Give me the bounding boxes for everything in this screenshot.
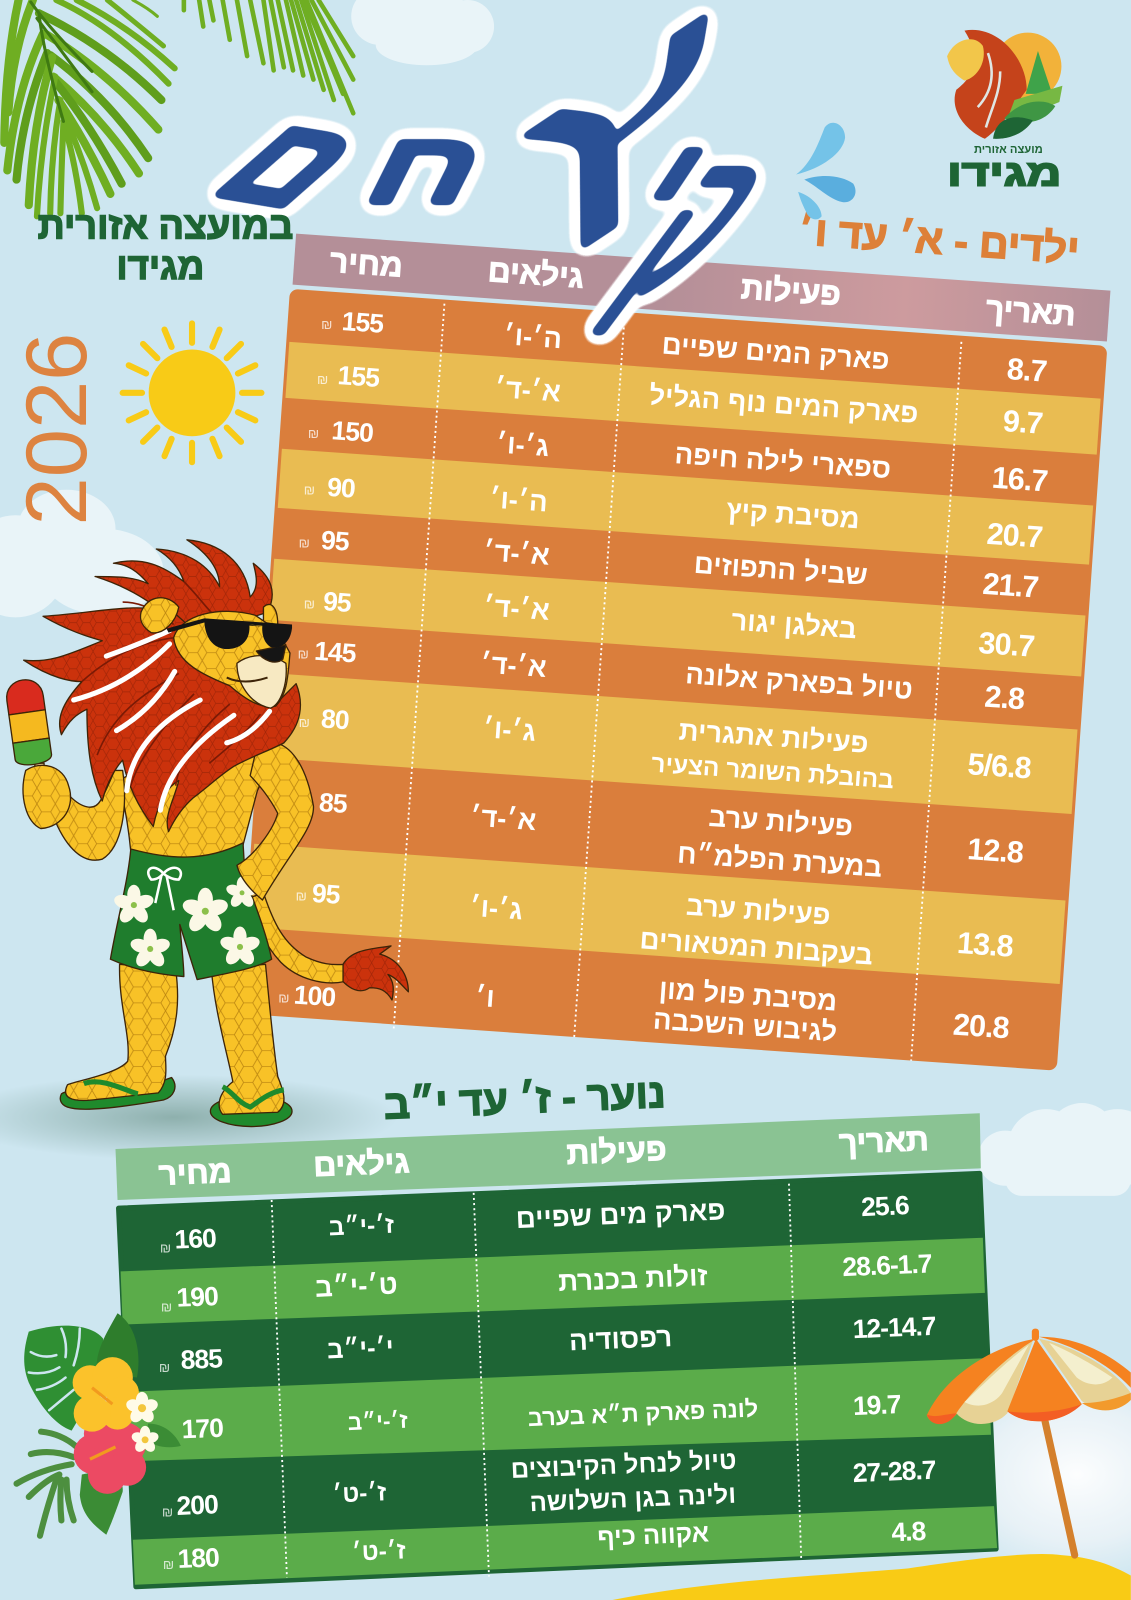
row 16.7: 150	[331, 415, 374, 448]
row 19.7: 170	[181, 1413, 224, 1444]
row 12.8	[318, 787, 1025, 883]
teens table header	[116, 1113, 981, 1200]
row 5/6.8: בהובלת השומר הצעיר	[651, 751, 895, 794]
lion smile	[227, 678, 268, 681]
row 21.7	[299, 525, 1039, 605]
row 25.6	[160, 1190, 910, 1255]
children table header: גילאים	[487, 252, 585, 295]
row 2.8	[298, 636, 1026, 716]
right arm	[237, 742, 313, 900]
row 12-14.7: 12-14.7	[852, 1311, 936, 1344]
row 8.7	[321, 306, 1048, 389]
row 9.7: ₪	[317, 372, 328, 387]
row 27-28.7: ולינה בגן השלושה	[529, 1481, 737, 1517]
mane white streaks	[74, 631, 270, 810]
row 5/6.8: 80	[320, 703, 350, 735]
teens table header: גילאים	[313, 1143, 410, 1183]
row 2.8: א׳-ד׳	[479, 648, 548, 683]
row 20.8: 20.8	[952, 1008, 1011, 1045]
row 19.7	[181, 1389, 901, 1444]
title letter: י	[592, 105, 743, 275]
palm fronds	[4, 0, 353, 216]
row 27-28.7: ז׳-ט׳	[332, 1479, 387, 1508]
row 9.7: 155	[337, 360, 381, 393]
cloud: left	[0, 490, 163, 617]
cloud: top	[351, 0, 494, 65]
row 8.7: 155	[341, 306, 385, 339]
row 4.8: 4.8	[891, 1516, 926, 1547]
row 19.7: ז׳-י״ב	[347, 1408, 408, 1435]
row 30.7: באלגן יגור	[730, 605, 858, 644]
row 21.7: 21.7	[982, 567, 1039, 605]
umbrella cream panel	[956, 1341, 1033, 1424]
logo: Megiddo regional council	[947, 30, 1062, 194]
row 8.7: פארק המים שפיים	[661, 329, 891, 375]
side leaf	[145, 1423, 181, 1447]
row 13.8: 95	[311, 878, 342, 910]
title letter: ם	[177, 92, 408, 233]
children table header: פעילות	[740, 269, 842, 312]
row 5/6.8: ג׳-ו׳	[482, 712, 537, 747]
umbrella right cream panel	[1039, 1339, 1131, 1408]
row 28.6-1.7: ₪	[161, 1300, 172, 1315]
children table header: מחיר	[329, 243, 404, 284]
row 12-14.7: 885	[180, 1343, 224, 1375]
row 21.7: שביל התפוזים	[693, 548, 869, 591]
row 20.7: ₪	[304, 482, 315, 497]
row 12-14.7: י׳-י״ב	[327, 1334, 394, 1364]
icon: sun	[123, 323, 261, 462]
lower leaf	[80, 1473, 123, 1535]
sunglasses	[167, 618, 292, 649]
row 30.7: 95	[322, 586, 353, 618]
row 20.8: ₪	[278, 990, 290, 1005]
lion face	[174, 611, 290, 707]
popsicle stick	[35, 763, 44, 782]
teens table header: פעילות	[566, 1131, 667, 1171]
sand	[612, 1554, 1131, 1600]
illustration: lion mascot	[4, 540, 408, 1127]
ground shadow band	[0, 1074, 398, 1160]
row 12-14.7: רפסודיה	[569, 1321, 673, 1356]
row 8.7: ה׳-ו׳	[503, 319, 563, 354]
row 4.8: 180	[177, 1542, 220, 1574]
table: teens	[116, 1113, 997, 1587]
row 12.8: פעילות ערב	[708, 801, 854, 842]
illustration: beach umbrella	[927, 1329, 1131, 1555]
lion nose	[256, 645, 286, 662]
row 16.7	[308, 415, 1048, 498]
children table rows background	[239, 289, 1107, 1075]
logo lion face	[947, 39, 984, 81]
row 20.7: ה׳-ו׳	[488, 482, 549, 518]
row 28.6-1.7: זולות בכנרת	[558, 1260, 708, 1297]
row 13.8: בעקבות המטאורים	[639, 923, 874, 971]
row 2.8: טיול בפארק אלונה	[685, 658, 914, 705]
year 2026: 2026	[8, 333, 105, 526]
row 28.6-1.7: 190	[176, 1281, 219, 1313]
row 19.7: 19.7	[852, 1389, 901, 1421]
row 12.8: 85	[318, 787, 349, 819]
row 19.7: לונה פארק ת״א בערב	[527, 1395, 759, 1431]
row 5/6.8	[299, 703, 1033, 794]
left arm	[53, 770, 124, 860]
row 13.8: פעילות ערב	[685, 890, 832, 931]
row 27-28.7: 27-28.7	[852, 1455, 936, 1488]
heading: council name: במועצה אזורית	[38, 205, 293, 247]
row 12-14.7: ₪	[159, 1360, 170, 1375]
lion muzzle	[237, 656, 286, 708]
logo tree	[1026, 51, 1052, 94]
row 4.8: אקווה כיף	[597, 1519, 710, 1552]
row 21.7: 95	[320, 525, 351, 557]
children table header	[293, 234, 1110, 342]
mane top spikes	[95, 540, 272, 633]
flip-flop straps	[84, 1082, 284, 1107]
umbrella right panel	[1039, 1337, 1131, 1388]
umbrella left panel	[927, 1339, 1035, 1423]
row 12.8: 12.8	[966, 832, 1025, 870]
row 21.7: ₪	[299, 535, 310, 550]
row 20.7: מסיבת קיץ	[725, 494, 861, 534]
icon: water splash	[796, 123, 856, 219]
fern leaves	[17, 1432, 77, 1536]
row 27-28.7: טיול לנחל הקיבוצים	[510, 1447, 737, 1484]
logo lion mane	[955, 30, 1027, 139]
row 28.6-1.7: ט׳-י״ב	[314, 1269, 398, 1303]
row 9.7: א׳-ד׳	[494, 372, 562, 408]
fog behind umbrella	[924, 1362, 1131, 1587]
monstera slits	[29, 1329, 80, 1410]
frond: right	[184, 0, 353, 113]
heading: council name	[38, 205, 293, 287]
white flowers	[125, 1392, 159, 1425]
subtitle: children: ילדים - א׳ עד ו׳	[797, 207, 1081, 273]
lion tail tuft	[343, 946, 408, 1000]
row 16.7: ₪	[308, 426, 319, 441]
row 5/6.8: ₪	[299, 715, 310, 730]
subtitle: teens: נוער - ז׳ עד י״ב	[383, 1070, 666, 1128]
row 25.6: פארק מים שפיים	[515, 1194, 726, 1234]
row 13.8: ג׳-ו׳	[469, 891, 524, 925]
row 2.8: ₪	[298, 647, 309, 662]
row 27-28.7: 200	[176, 1489, 219, 1521]
monstera leaf	[24, 1326, 103, 1431]
umbrella top	[1032, 1329, 1039, 1341]
row 25.6: 160	[174, 1223, 217, 1255]
row 20.7: 90	[326, 472, 356, 504]
row 16.7: ג׳-ו׳	[495, 428, 550, 462]
heading: council name: מגידו	[117, 246, 204, 287]
row 2.8: 145	[313, 636, 358, 669]
right leg	[211, 964, 284, 1114]
right flip-flop	[210, 1096, 292, 1127]
lion tail	[249, 893, 345, 983]
cloud: right	[978, 1103, 1131, 1196]
lion torso	[119, 740, 281, 859]
row 4.8: ז׳-ט׳	[351, 1537, 406, 1567]
row 13.8: ₪	[296, 888, 307, 903]
left leg	[66, 964, 178, 1100]
umbrella left panel tip	[927, 1413, 956, 1424]
umbrella pole	[1045, 1421, 1075, 1555]
row 21.7: א׳-ד׳	[482, 535, 551, 571]
row 25.6: ₪	[160, 1240, 171, 1255]
row 20.8: לגיבוש השכבה	[652, 1004, 838, 1047]
row 27-28.7	[162, 1447, 936, 1521]
row 20.8: ו׳	[474, 981, 496, 1013]
left flip-flop	[60, 1078, 175, 1109]
popsicle	[4, 677, 53, 767]
teens table header: מחיר	[158, 1153, 232, 1192]
row 20.8: מסיבת פול מון	[658, 973, 838, 1017]
swim shorts	[110, 843, 272, 980]
row 9.7: 9.7	[1002, 404, 1044, 441]
upper leaf	[97, 1313, 138, 1378]
row 4.8: ₪	[163, 1557, 174, 1572]
logo caption: מועצה אזורית	[974, 144, 1043, 156]
title: hot summer	[177, 0, 821, 339]
title letter: ק	[579, 103, 821, 339]
row 30.7: 30.7	[977, 626, 1035, 664]
row 20.7: 20.7	[986, 517, 1043, 555]
row 30.7: א׳-ד׳	[482, 590, 551, 626]
row 25.6: 25.6	[861, 1190, 910, 1222]
logo field	[1005, 86, 1062, 124]
mane body	[24, 608, 300, 832]
flower centers	[90, 1388, 116, 1459]
shorts flowers	[112, 877, 261, 969]
row 28.6-1.7	[161, 1248, 932, 1315]
row 5/6.8: פעילות אתגרית	[678, 715, 869, 759]
row 9.7: פארק המים נוף הגליל	[648, 379, 919, 429]
title letter: ח	[345, 111, 510, 225]
row 13.8	[296, 878, 1015, 971]
row 5/6.8: 5/6.8	[967, 747, 1033, 786]
row 16.7: ספארי לילה חיפה	[674, 438, 892, 484]
row 12.8: א׳-ד׳	[469, 801, 538, 836]
umbrella center panel	[1007, 1339, 1082, 1421]
row 2.8: 2.8	[983, 680, 1026, 716]
row 9.7	[317, 360, 1044, 441]
teens table header: תאריך	[838, 1121, 929, 1161]
row 25.6: ז׳-י״ב	[328, 1212, 395, 1241]
row 12-14.7	[159, 1311, 936, 1375]
frond: left	[4, 0, 175, 216]
illustration: flowers	[17, 1313, 181, 1536]
row 20.7	[304, 472, 1043, 555]
row 28.6-1.7: 28.6-1.7	[842, 1248, 932, 1282]
pink hibiscus	[74, 1418, 146, 1494]
row 16.7: 16.7	[991, 461, 1048, 498]
children table header: תאריך	[985, 290, 1077, 332]
fist	[23, 765, 71, 829]
logo sun	[994, 33, 1061, 100]
row 20.8	[278, 973, 1011, 1047]
teens table rows background	[119, 1173, 997, 1587]
yellow hibiscus	[73, 1357, 139, 1432]
row 8.7: ₪	[321, 317, 332, 332]
row 27-28.7: ₪	[162, 1505, 173, 1520]
row 30.7	[304, 586, 1035, 664]
row 13.8: 13.8	[956, 926, 1015, 964]
lion ear	[140, 598, 179, 633]
row 30.7: ₪	[304, 597, 315, 612]
row 12.8: במערת הפלמ״ח	[676, 838, 883, 883]
logo name: מגידו	[947, 153, 1061, 194]
row 8.7: 8.7	[1006, 352, 1048, 389]
table: children	[239, 234, 1110, 1075]
mane strand lines	[82, 582, 260, 786]
row 4.8	[163, 1516, 926, 1574]
shorts drawstring	[148, 868, 181, 910]
row 20.8: 100	[293, 980, 336, 1012]
